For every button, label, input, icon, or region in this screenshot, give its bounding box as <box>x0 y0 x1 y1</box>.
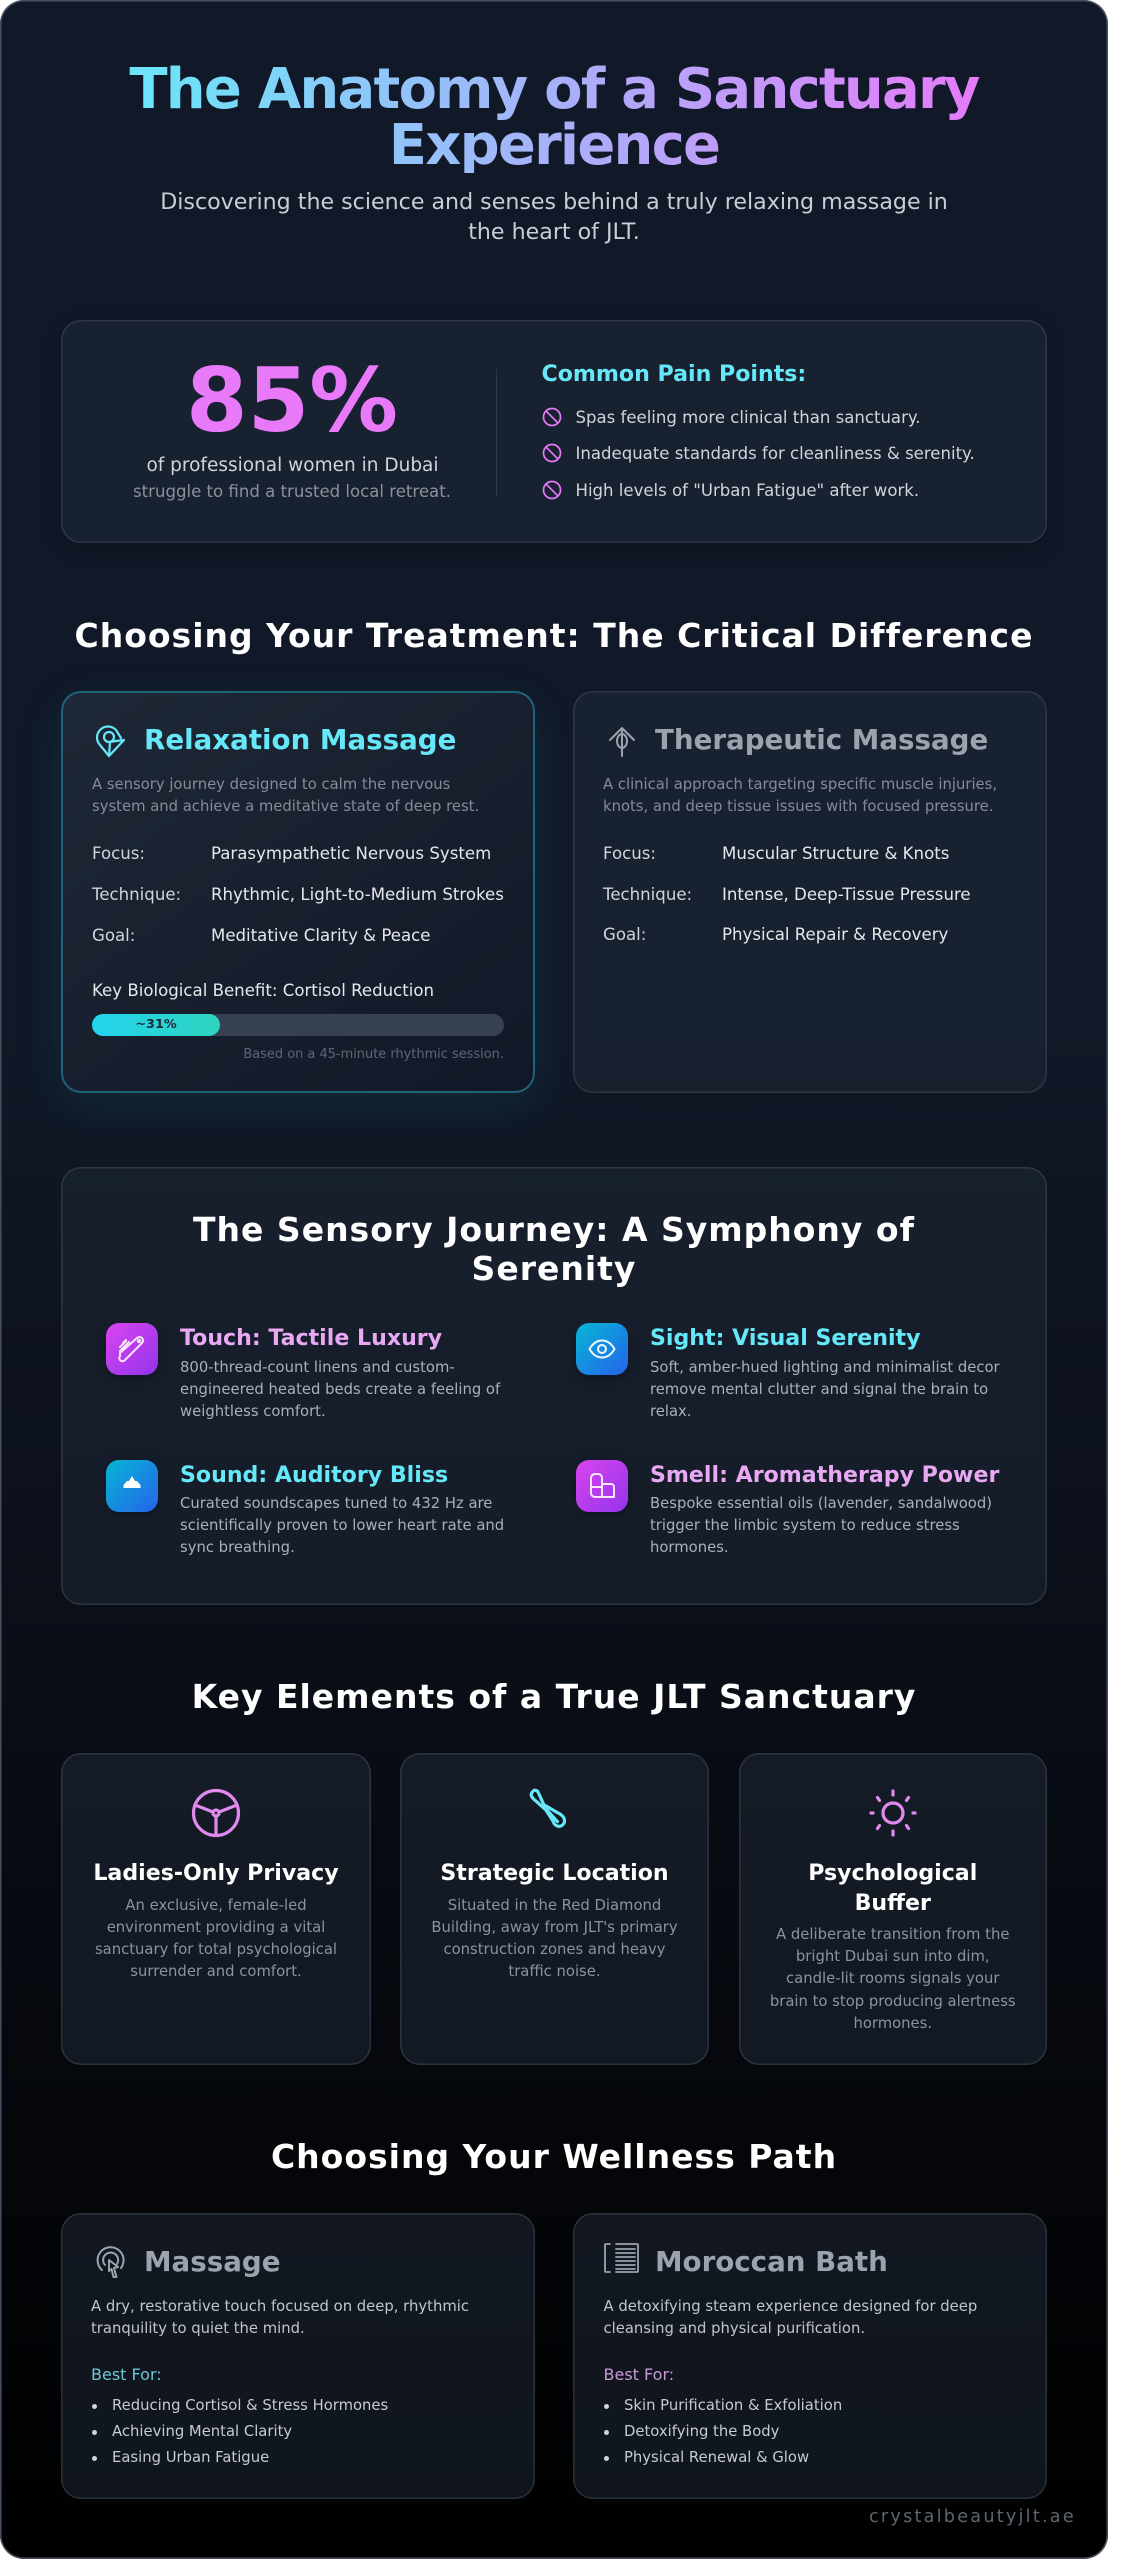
panel: massage path <box>61 2213 535 2499</box>
row: goal: Goal: <box>92 926 135 945</box>
title: Experience <box>389 112 719 178</box>
row: technique: Technique: <box>92 885 181 904</box>
text: sanctuary for total psychological <box>95 1941 337 1958</box>
text <box>95 1896 337 1980</box>
sound title: Sound: Auditory Bliss <box>180 1462 448 1488</box>
icon: ban <box>542 480 562 500</box>
smell text: trigger the limbic system to reduce stress <box>650 1517 960 1534</box>
title: Strategic Location <box>440 1860 669 1886</box>
sight title: Sight: Visual Serenity <box>650 1325 920 1351</box>
panel: psychological buffer <box>738 1753 1047 2065</box>
text: hormones. <box>853 2015 932 2032</box>
heading: key elements: Key Elements of a True JLT Sanctuary <box>192 1677 916 1716</box>
heading <box>193 1210 915 1288</box>
description: A detoxifying steam experience designed for deep <box>604 2298 977 2315</box>
icon: relaxation <box>96 725 126 758</box>
benefit label: Key Biological Benefit: Cortisol Reduction <box>92 981 434 1000</box>
card title: Therapeutic Massage <box>655 723 988 756</box>
panel: sensory journey <box>61 1167 1047 1605</box>
row: focus: Parasympathetic Nervous System <box>211 844 491 863</box>
text <box>431 1896 678 1980</box>
big number 85%: 85% <box>186 349 398 452</box>
touch title: Touch: Tactile Luxury <box>180 1325 442 1351</box>
text: environment providing a vital <box>107 1919 325 1936</box>
title: The Anatomy of a Sanctuary <box>129 57 979 122</box>
subtitle: the heart of JLT. <box>468 218 640 244</box>
list: Skin Purification & Exfoliation <box>624 2397 842 2414</box>
heading: wellness path: Choosing Your Wellness Path <box>271 2137 837 2176</box>
subtitle <box>160 188 948 244</box>
row: goal: Meditative Clarity & Peace <box>211 926 431 945</box>
icon: sight <box>576 1323 628 1375</box>
icon: moroccan lines <box>604 2243 639 2273</box>
sight text: Soft, amber-hued lighting and minimalist decor <box>650 1359 1000 1376</box>
panel: statistic and pain points <box>61 320 1047 543</box>
text: traffic noise. <box>508 1963 601 1980</box>
text: brain to stop producing alertness <box>770 1993 1016 2010</box>
icon: ban <box>542 408 562 426</box>
text: Building, away from JLT's primary <box>431 1919 678 1936</box>
text <box>770 1926 1016 2032</box>
text: bright Dubai sun into dim, <box>796 1948 990 1965</box>
sight text: relax. <box>650 1403 692 1420</box>
touch text <box>180 1359 500 1420</box>
list <box>92 2397 388 2466</box>
bar note: Based on a 45-minute rhythmic session. <box>243 1047 504 1062</box>
text: A deliberate transition from the <box>776 1926 1009 1943</box>
description: cleansing and physical purification. <box>604 2320 865 2337</box>
row: goal: Goal: <box>603 925 646 944</box>
icon: smell <box>576 1460 628 1512</box>
icon: bow <box>530 1788 566 1828</box>
progress bar <box>92 1014 504 1036</box>
touch text: 800-thread-count linens and custom- <box>180 1359 455 1376</box>
icon: touch <box>106 1323 158 1375</box>
description <box>91 2298 469 2337</box>
row: focus <box>603 844 949 863</box>
list: Easing Urban Fatigue <box>112 2449 269 2466</box>
smell text: Bespoke essential oils (lavender, sandalwood) <box>650 1495 992 1512</box>
best for label: Best For: <box>604 2365 674 2384</box>
row: technique <box>602 885 971 904</box>
pain point 2: Inadequate standards for cleanliness & serenity. <box>576 444 975 462</box>
card description <box>603 776 997 815</box>
footer website: crystalbeautyjlt.ae <box>869 2507 1076 2527</box>
title: Psychological <box>808 1860 977 1886</box>
card description: system and achieve a meditative state of deep rest. <box>92 798 479 815</box>
text: construction zones and heavy <box>443 1941 666 1958</box>
best for label: Best For: <box>91 2365 162 2384</box>
list: Achieving Mental Clarity <box>112 2423 292 2440</box>
text: candle-lit rooms signals your <box>786 1970 999 1987</box>
row: goal <box>603 925 948 944</box>
progress fill 31%: ~31% <box>135 1017 177 1032</box>
heading: The Sensory Journey: A Symphony of <box>193 1210 915 1248</box>
stat caption: of professional women in Dubai <box>146 455 439 476</box>
icon: sound <box>106 1460 158 1512</box>
text: surrender and comfort. <box>130 1963 302 1980</box>
sound text <box>180 1495 504 1556</box>
card description: A clinical approach targeting specific muscle injuries, <box>603 776 997 793</box>
sight text: remove mental clutter and signal the brain to <box>650 1381 988 1398</box>
progress fill 31% <box>92 1014 220 1036</box>
smell text: hormones. <box>650 1539 729 1556</box>
pain points heading: Common Pain Points: <box>542 361 806 387</box>
heading: treatment: Choosing Your Treatment: The Critical Difference <box>74 616 1034 655</box>
heading: Serenity <box>472 1248 636 1288</box>
row: goal: Physical Repair & Recovery <box>722 925 948 944</box>
icon: sun <box>869 1789 917 1837</box>
subtitle: Discovering the science and senses behind a truly relaxing massage in <box>160 188 948 214</box>
touch text: engineered heated beds create a feeling of <box>180 1381 500 1398</box>
list: Physical Renewal & Glow <box>624 2449 809 2466</box>
text: An exclusive, female-led <box>125 1896 307 1914</box>
panel: therapeutic massage <box>573 691 1047 1093</box>
smell title: Smell: Aromatherapy Power <box>650 1462 999 1488</box>
panel: moroccan bath path <box>573 2213 1047 2499</box>
icon: touch rings <box>96 2246 125 2278</box>
icon: therapeutic <box>609 727 635 757</box>
sound text: Curated soundscapes tuned to 432 Hz are <box>180 1495 492 1512</box>
description <box>604 2298 977 2337</box>
description: A dry, restorative touch focused on deep, rhythmic <box>91 2298 469 2315</box>
list <box>604 2397 842 2466</box>
smell text <box>650 1495 992 1556</box>
title: Buffer <box>855 1890 931 1916</box>
title <box>110 62 998 173</box>
list: Reducing Cortisol & Stress Hormones <box>112 2397 388 2414</box>
description: tranquility to quiet the mind. <box>91 2320 305 2337</box>
row: goal <box>92 926 431 945</box>
row: technique: Intense, Deep-Tissue Pressure <box>722 885 971 904</box>
title: Moroccan Bath <box>655 2245 888 2278</box>
title <box>808 1860 977 1916</box>
pain point 1: Spas feeling more clinical than sanctuary. <box>576 408 921 426</box>
row: focus: Muscular Structure & Knots <box>722 844 949 863</box>
row: focus: Focus: <box>92 844 145 863</box>
card title: Relaxation Massage <box>144 723 456 756</box>
list: Detoxifying the Body <box>624 2423 779 2440</box>
row: technique: Rhythmic, Light-to-Medium Strokes <box>211 885 504 904</box>
title: Massage <box>144 2245 280 2278</box>
row: focus: Focus: <box>603 844 656 863</box>
icon: ban <box>542 444 562 462</box>
sight text <box>650 1359 1000 1420</box>
stat sub-caption: struggle to find a trusted local retreat. <box>133 482 451 501</box>
sound text: sync breathing. <box>180 1539 295 1556</box>
panel: relaxation massage <box>61 691 535 1093</box>
card description <box>92 776 479 815</box>
text: Situated in the Red Diamond <box>448 1896 661 1914</box>
panel: ladies-only privacy <box>61 1753 371 2065</box>
card description: A sensory journey designed to calm the nervous <box>92 776 450 793</box>
touch text: weightless comfort. <box>180 1403 326 1420</box>
sound text: scientifically proven to lower heart rate and <box>180 1517 504 1534</box>
panel: strategic location <box>400 1753 709 2065</box>
card description: knots, and deep tissue issues with focused pressure. <box>603 798 994 815</box>
row: technique: Technique: <box>603 885 692 904</box>
pain point 3: High levels of "Urban Fatigue" after work. <box>576 480 919 500</box>
icon: wheel <box>192 1788 240 1838</box>
title: Ladies-Only Privacy <box>93 1860 339 1886</box>
